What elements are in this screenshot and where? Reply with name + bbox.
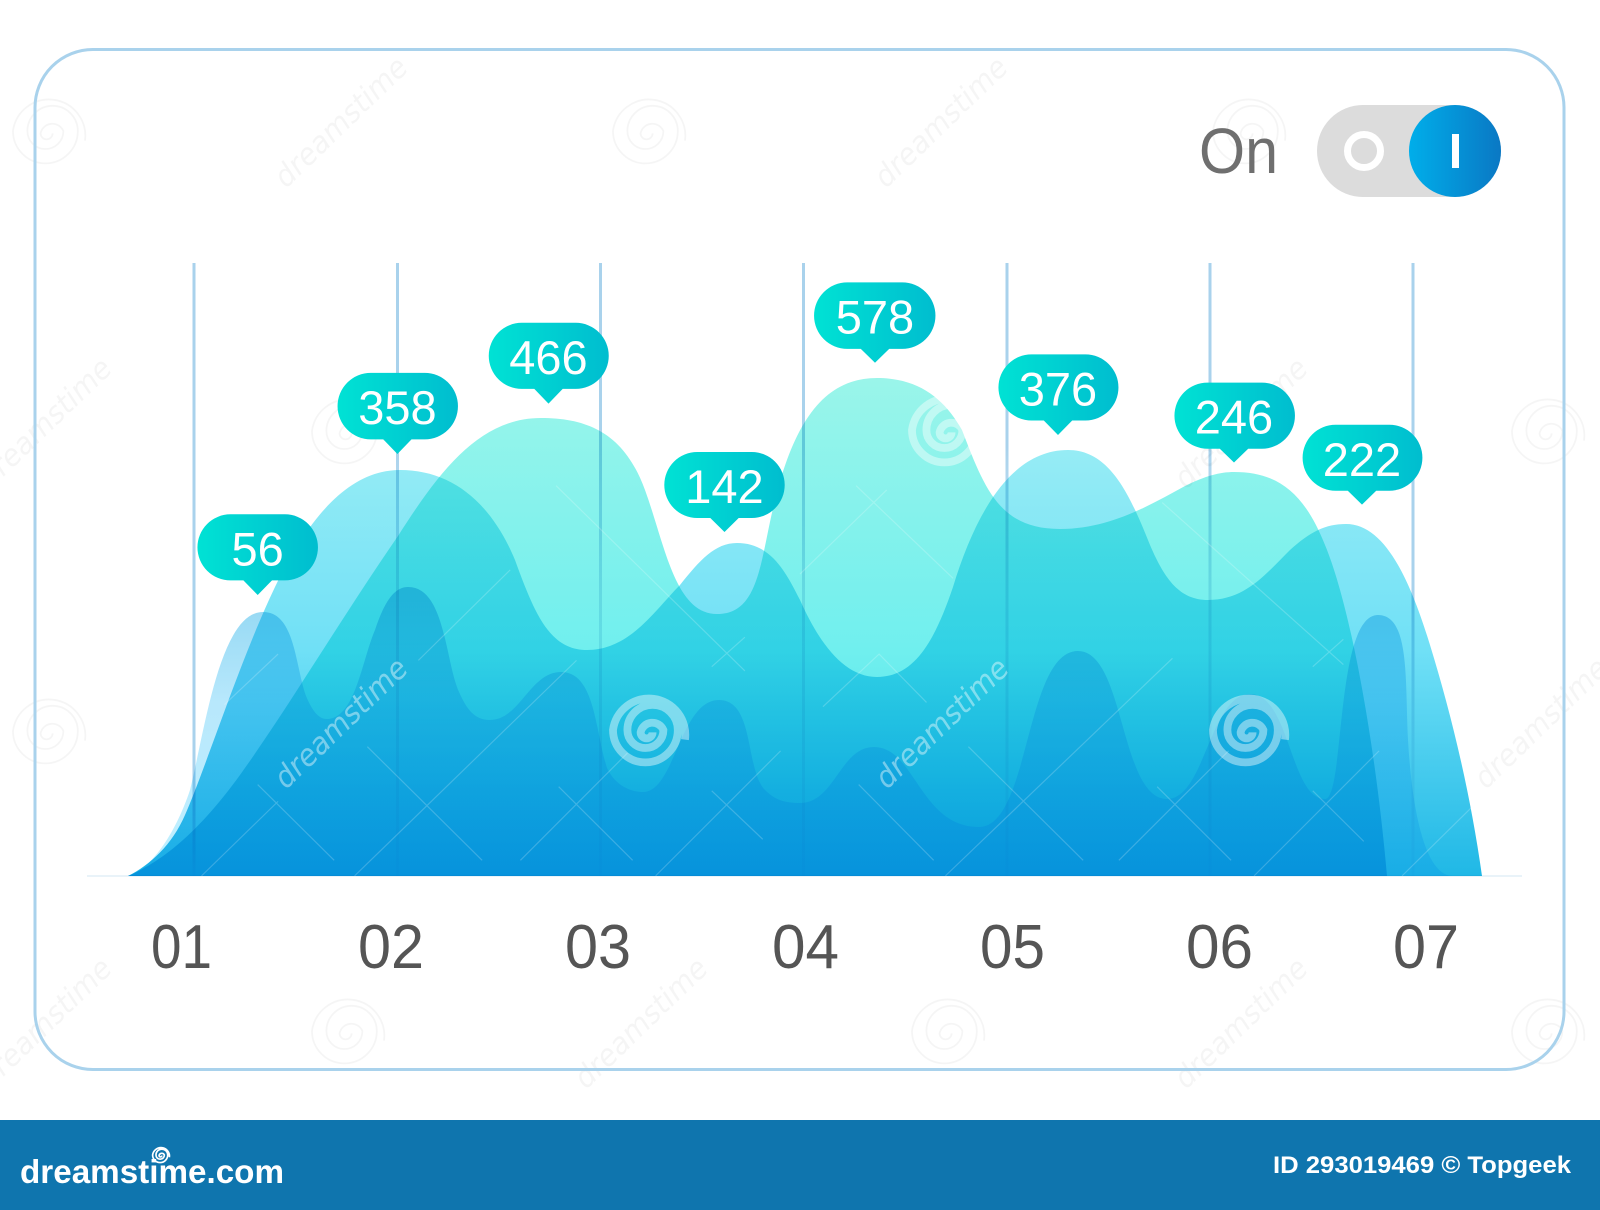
- area series: mint: [128, 378, 1387, 876]
- toggle label: On: On: [1199, 115, 1278, 187]
- footer logo: dreamstime.com: [20, 1153, 284, 1190]
- callout: 56: 56: [232, 522, 284, 576]
- callout: 56: [197, 514, 318, 595]
- faint watermark text: dreamstime: [1167, 951, 1315, 1096]
- watermark text on chart: [267, 651, 1016, 796]
- footer bar: [0, 1120, 1600, 1210]
- toggle switch: [1317, 105, 1501, 197]
- callout: 358: 358: [358, 381, 437, 434]
- area chart: [128, 378, 1482, 876]
- callout: 358: [338, 373, 458, 454]
- x axis labels: 02: [358, 913, 424, 982]
- watermark spirals on chart: [613, 398, 1285, 762]
- x axis labels: 06: [1186, 913, 1253, 982]
- callout: 142: [664, 452, 785, 532]
- callout: 578: [814, 282, 935, 363]
- faint watermark text: dreamstime: [567, 951, 715, 1096]
- callout: 142: 142: [685, 460, 764, 513]
- faint watermark text: dreamstime: [867, 50, 1015, 195]
- callout: 246: 246: [1195, 390, 1273, 444]
- x axis labels: [151, 913, 1459, 982]
- x axis labels: 01: [151, 913, 212, 982]
- x axis labels: 03: [565, 913, 631, 982]
- footer credit: ID 293019469 © Topgeek: [1273, 1152, 1572, 1179]
- callout: 578: 578: [836, 290, 914, 344]
- x axis labels: 05: [980, 913, 1045, 982]
- faint watermark text: dreamstime: [1167, 351, 1315, 496]
- faint watermark text: dreamstime: [267, 50, 415, 195]
- x axis labels: 04: [772, 913, 839, 982]
- vertical grid lines: [194, 263, 1413, 876]
- callout: 222: 222: [1323, 433, 1401, 486]
- callout: 222: [1303, 425, 1422, 505]
- area series: sky blue: [128, 450, 1482, 876]
- callout: 466: 466: [509, 331, 588, 384]
- callout: 376: 376: [1019, 362, 1097, 416]
- callout: 466: [489, 323, 609, 404]
- area series: blue: [128, 587, 1453, 876]
- axis baseline: [87, 875, 1522, 877]
- x axis labels: 07: [1393, 913, 1459, 982]
- watermark text on chart: dreamstime: [868, 651, 1016, 796]
- callout: 376: [998, 354, 1118, 435]
- callout: 246: [1174, 383, 1295, 462]
- watermark cross lines on chart: [202, 486, 1473, 876]
- watermark text on chart: dreamstime: [267, 651, 415, 796]
- faint watermark spirals: [13, 99, 1584, 1063]
